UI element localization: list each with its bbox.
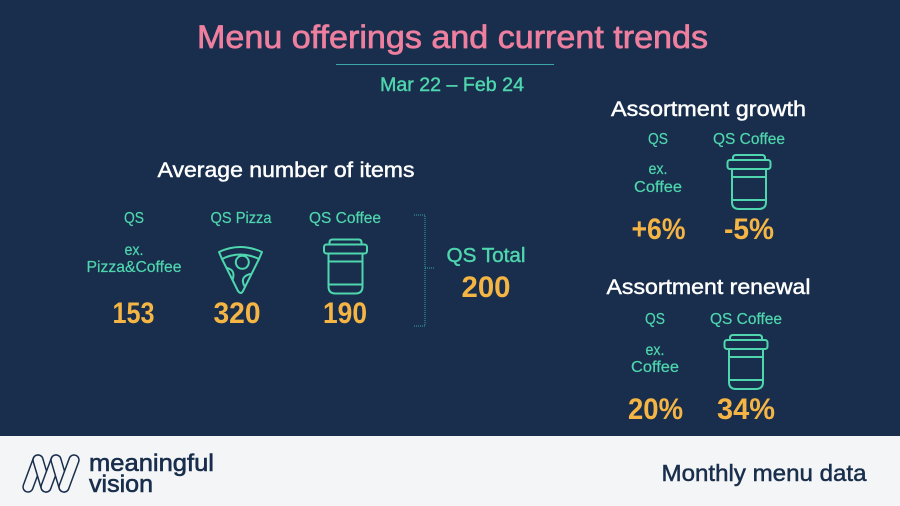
column: QS ex. Coffee renewal: 20% <box>628 393 683 426</box>
date range: Mar 22 – Feb 24 <box>380 75 524 96</box>
column: QS Coffee <box>309 210 381 330</box>
footer label: Monthly menu data <box>662 460 867 486</box>
column: QS Pizza <box>210 210 272 330</box>
panel: assortment growth <box>611 98 806 246</box>
footer bar <box>0 436 900 506</box>
QS total: 200 <box>462 271 510 304</box>
heading: average number of items: Average number of items <box>158 159 414 182</box>
column: QS ex. Coffee renewal <box>628 311 683 426</box>
icon: meaningful vision logo <box>28 460 74 487</box>
column: QS Pizza: 320 <box>214 297 260 330</box>
column: QS ex. Coffee growth: Coffee <box>634 179 682 196</box>
bracket <box>414 215 434 326</box>
column: QS Coffee renewal: QS Coffee <box>710 311 782 328</box>
column: QS ex. Coffee growth: ex. <box>648 161 668 178</box>
column: QS ex. Coffee renewal: Coffee <box>631 359 679 376</box>
logo wordmark: vision <box>89 471 153 498</box>
column: QS Coffee renewal: 34% <box>717 393 775 426</box>
column: QS ex. Pizza and Coffee: ex. <box>124 242 144 259</box>
column: QS Pizza: QS Pizza <box>210 210 272 227</box>
icon: coffee cup <box>324 240 367 294</box>
column: QS ex. Coffee renewal: QS <box>645 311 665 328</box>
QS total <box>446 245 526 304</box>
panel: average number of items <box>86 159 526 330</box>
column: QS Coffee growth: -5% <box>724 213 774 246</box>
column: QS Coffee growth: QS Coffee <box>713 131 785 148</box>
QS total: QS Total <box>446 245 526 267</box>
column: QS ex. Pizza and Coffee: QS <box>124 210 144 227</box>
heading: assortment renewal: Assortment renewal <box>606 276 810 299</box>
column: QS ex. Pizza and Coffee <box>86 210 182 330</box>
column: QS ex. Coffee renewal: ex. <box>646 342 664 359</box>
column: QS ex. Pizza and Coffee: Pizza&Coffee <box>86 259 182 276</box>
icon: coffee cup <box>728 155 770 209</box>
column: QS Coffee: QS Coffee <box>309 210 381 227</box>
column: QS ex. Pizza and Coffee: 153 <box>112 297 154 330</box>
icon: coffee cup <box>724 335 768 389</box>
column: QS ex. Coffee growth: QS <box>648 131 668 148</box>
logo wordmark <box>89 450 214 498</box>
column: QS Coffee: 190 <box>323 297 367 330</box>
logo wordmark: meaningful <box>89 450 214 477</box>
panel: assortment renewal <box>606 276 810 426</box>
column: QS ex. Coffee growth <box>632 131 686 246</box>
column: QS Coffee renewal <box>710 311 782 426</box>
column: QS Coffee growth <box>713 131 785 246</box>
column: QS ex. Coffee growth: +6% <box>632 213 686 246</box>
title underline <box>336 64 554 65</box>
title: Menu offerings and current trends <box>197 19 708 55</box>
heading: assortment growth: Assortment growth <box>611 98 806 121</box>
icon: pizza slice <box>219 247 262 293</box>
